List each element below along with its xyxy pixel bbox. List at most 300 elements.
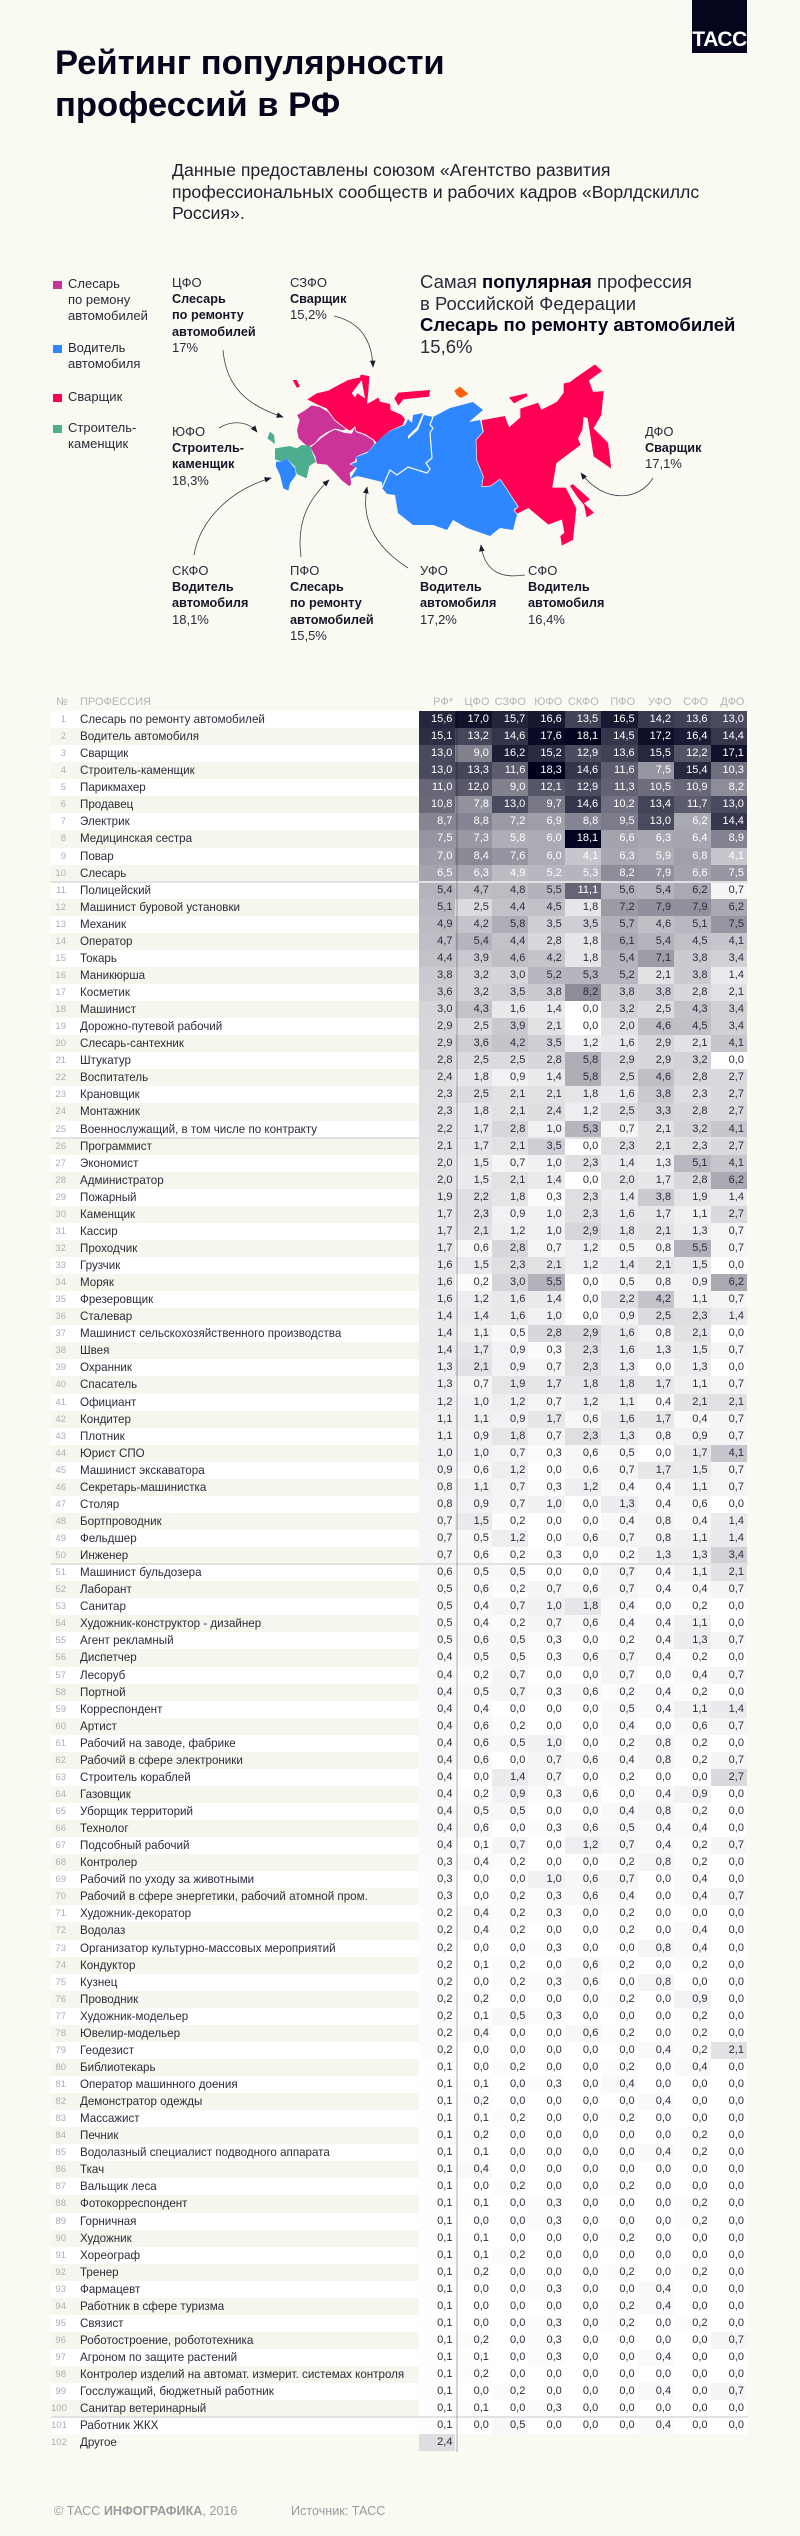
row 74: 0,2 (510, 1959, 525, 1971)
row 74: 74 (55, 1960, 66, 1971)
row 10: 5,3 (583, 867, 598, 879)
row 25: 5,3 (583, 1122, 598, 1134)
row 22: 4,6 (656, 1071, 671, 1083)
row 76: 0,0 (656, 1993, 671, 2005)
row 70: 0,2 (510, 1890, 525, 1902)
label: ЮФО: каменщик (172, 457, 234, 471)
row 1: 15,6 (431, 713, 452, 725)
row 38: 2,3 (583, 1344, 598, 1356)
row 64: 0,3 (546, 1788, 562, 1800)
row 65: 0,8 (656, 1805, 671, 1817)
row 37: 2,1 (692, 1327, 708, 1339)
row 77: 0,3 (546, 2010, 562, 2022)
row 46: 1,1 (692, 1481, 708, 1493)
row 6: Продавец (80, 798, 133, 811)
row 83: 0,0 (583, 2112, 598, 2124)
row 35: 1,1 (692, 1293, 708, 1305)
row 77: 0,2 (692, 2010, 708, 2022)
row 79: 0,2 (437, 2044, 452, 2056)
row 14: 6,1 (619, 935, 635, 947)
row 55: 0,0 (583, 1634, 598, 1646)
row 100: 0,0 (510, 2402, 525, 2414)
row 93: 0,0 (510, 2283, 525, 2295)
arrow: ЮФО (219, 423, 257, 432)
row 1: 16,6 (540, 713, 562, 725)
label: СКФО: Водитель (172, 580, 234, 594)
row 97: 0,1 (437, 2351, 452, 2363)
row 1: 13,6 (686, 713, 708, 725)
row 70: 0,3 (546, 1890, 562, 1902)
row 53: 0,5 (437, 1600, 452, 1612)
row 84: 0,0 (546, 2129, 562, 2141)
row 33: 1,6 (437, 1259, 452, 1271)
row 100 (51, 2400, 748, 2417)
row 62: 0,6 (583, 1754, 598, 1766)
row 14: 1,8 (583, 935, 598, 947)
row 31 (51, 1223, 748, 1240)
header: СЗФО: СЗФО (495, 696, 526, 708)
row 68: 0,8 (656, 1856, 671, 1868)
row 96: 0,1 (437, 2334, 452, 2346)
row 12: 7,9 (692, 901, 708, 913)
row 9 (51, 848, 748, 865)
row 24: 2,5 (619, 1105, 635, 1117)
row 51: 2,1 (729, 1566, 744, 1578)
row 17 (51, 984, 748, 1001)
row 86: 86 (55, 2164, 66, 2175)
row 27: 1,3 (656, 1157, 671, 1169)
row 22 (51, 1069, 748, 1086)
row 2: 14,4 (723, 730, 744, 742)
row 78: 0,6 (583, 2027, 598, 2039)
row 50 (51, 1547, 748, 1564)
row 62: 0,4 (437, 1754, 452, 1766)
row 95: 0,0 (583, 2317, 598, 2329)
row 18: 1,4 (546, 1003, 562, 1015)
row 98: 0,2 (474, 2368, 489, 2380)
row 55: 0,6 (474, 1634, 489, 1646)
row 55: 0,7 (729, 1634, 744, 1646)
row 31: 1,8 (619, 1225, 635, 1237)
row 42 (51, 1411, 748, 1428)
row 20: 2,1 (692, 1037, 708, 1049)
row 19: 3,9 (510, 1020, 525, 1032)
row 45: Машинист экскаватора (80, 1464, 205, 1477)
row 36 (51, 1308, 748, 1325)
row 62: 0,0 (510, 1754, 525, 1766)
row 20: 20 (55, 1038, 66, 1049)
row 61: 0,2 (619, 1737, 635, 1749)
map: ural and siberian districts (350, 402, 518, 536)
row 89: 0,3 (546, 2214, 562, 2226)
row 34: 34 (55, 1277, 66, 1288)
row 97: 0,0 (510, 2351, 525, 2363)
row 88: 0,2 (692, 2197, 708, 2209)
row 13: 7,5 (729, 918, 744, 930)
row 80 (51, 2059, 748, 2076)
row 60: 0,6 (692, 1720, 708, 1732)
row 45: 0,7 (729, 1464, 744, 1476)
row 25: 2,2 (437, 1122, 452, 1134)
row 85: 0,0 (729, 2146, 744, 2158)
row 7: 6,2 (692, 815, 708, 827)
row 2: 2 (61, 731, 66, 742)
row 46: 0,7 (729, 1481, 744, 1493)
row 33: 2,3 (510, 1259, 525, 1271)
row 77: 0,0 (583, 2010, 598, 2022)
row 72: 0,2 (619, 1924, 635, 1936)
row 12: 1,8 (583, 901, 598, 913)
row 94: 0,0 (729, 2300, 744, 2312)
row 36: 1,4 (437, 1310, 452, 1322)
row 64: 0,9 (510, 1788, 525, 1800)
row 67: 0,1 (474, 1839, 489, 1851)
row 41: 1,1 (619, 1396, 635, 1408)
row 77: 0,0 (619, 2010, 635, 2022)
row 1: Слесарь по ремонту автомобилей (80, 713, 265, 726)
row 95: 0,2 (619, 2317, 635, 2329)
row 93: 0,0 (729, 2283, 744, 2295)
row 55 (51, 1632, 748, 1649)
row 57: 0,0 (546, 1668, 562, 1680)
row 3: 9,0 (474, 747, 489, 759)
row 36: 1,4 (474, 1310, 489, 1322)
row 11: 4,8 (510, 884, 525, 896)
row 75: 0,3 (546, 1976, 562, 1988)
main callout: 15,6% (420, 336, 472, 357)
label: ДФО (645, 424, 702, 471)
row 99: 0,7 (729, 2385, 744, 2397)
row 21: 0,0 (729, 1054, 744, 1066)
row 33: 2,1 (656, 1259, 671, 1271)
row 1: 15,7 (504, 713, 525, 725)
row 37: 1,1 (474, 1327, 489, 1339)
row 15: 3,4 (729, 952, 744, 964)
row 79 (51, 2042, 748, 2059)
row 93: 0,4 (656, 2283, 671, 2295)
row 35: Фрезеровщик (80, 1293, 153, 1306)
row 73: 0,8 (656, 1942, 671, 1954)
row 87: 87 (55, 2181, 66, 2192)
row 8: 6,0 (546, 832, 562, 844)
row 29: 1,4 (619, 1191, 635, 1203)
row 5: 12,9 (577, 781, 598, 793)
row 9: 5,9 (656, 850, 671, 862)
row 57: 0,7 (729, 1668, 744, 1680)
row 22: 2,8 (692, 1071, 708, 1083)
row 100: 0,0 (583, 2402, 598, 2414)
row 28 (51, 1172, 748, 1189)
row 9: 4,1 (583, 850, 598, 862)
row 26: 2,1 (510, 1140, 525, 1152)
row 76: 0,2 (474, 1993, 489, 2005)
row 82: 0,0 (692, 2095, 708, 2107)
row 17: 2,8 (692, 986, 708, 998)
row 90 (51, 2230, 748, 2247)
row 43: 2,3 (583, 1430, 598, 1442)
row 45: 0,7 (619, 1464, 635, 1476)
logo: TASS (692, 0, 747, 53)
row 32: 0,5 (619, 1242, 635, 1254)
row 79: 0,4 (656, 2044, 671, 2056)
label: УФО: Водитель (420, 580, 482, 594)
row 82: 0,0 (510, 2095, 525, 2107)
row 85 (51, 2144, 748, 2161)
row 11: 11,1 (578, 884, 598, 896)
row 81: 0,1 (437, 2078, 452, 2090)
row 101: 0,5 (510, 2419, 525, 2431)
row 37: 2,9 (583, 1327, 598, 1339)
row 2: 18,1 (577, 730, 598, 742)
row 98: 0,0 (510, 2368, 525, 2380)
row 32: Проходчик (80, 1242, 137, 1255)
row 53: 0,4 (619, 1600, 635, 1612)
row 44 (51, 1445, 748, 1462)
row 2 (51, 728, 748, 745)
row 41: 1,2 (583, 1396, 598, 1408)
row 80: 0,2 (619, 2061, 635, 2073)
row 63: 0,4 (437, 1771, 452, 1783)
row 31: 1,2 (510, 1225, 525, 1237)
row 40 (51, 1376, 748, 1394)
row 73: 73 (55, 1942, 66, 1954)
row 92: 0,2 (619, 2266, 635, 2278)
row 15: 4,4 (437, 952, 452, 964)
row 56: 0,4 (437, 1651, 452, 1663)
row 63: 0,2 (619, 1771, 635, 1783)
row 80: 0,1 (437, 2061, 452, 2073)
row 55: 0,4 (656, 1634, 671, 1646)
row 84: Печник (80, 2129, 118, 2142)
row 86: 0,0 (656, 2163, 671, 2175)
row 76: 0,2 (437, 1993, 452, 2005)
row 33: 1,4 (619, 1259, 635, 1271)
row 90: 0,0 (510, 2232, 525, 2244)
row 55: 0,3 (546, 1634, 562, 1646)
row 24: 1,8 (474, 1105, 489, 1117)
row 56: 0,0 (729, 1651, 744, 1663)
row 31: 2,1 (474, 1225, 489, 1237)
row 53: 0,4 (474, 1600, 489, 1612)
row 46: 1,1 (474, 1481, 489, 1493)
row 77: 0,2 (437, 2010, 452, 2022)
row 20: Слесарь-сантехник (80, 1037, 184, 1050)
row 32: 2,8 (510, 1242, 525, 1254)
row 55: 0,5 (437, 1634, 452, 1646)
row 81: 0,0 (583, 2078, 598, 2090)
row 27: 5,1 (692, 1157, 708, 1169)
row 17: 3,6 (437, 986, 452, 998)
row 4: 7,5 (656, 764, 671, 776)
row 30: 30 (55, 1209, 66, 1220)
row 99: 0,0 (619, 2385, 635, 2397)
row 70: 0,3 (437, 1890, 452, 1902)
label: ПФО: автомобилей (290, 613, 374, 627)
row 86: 0,0 (729, 2163, 744, 2175)
row 97: 0,0 (729, 2351, 744, 2363)
row 47: 0,0 (729, 1498, 744, 1510)
row 99: Госслужащий, бюджетный работник (80, 2385, 274, 2398)
row 13: 5,1 (692, 918, 708, 930)
row 40: 0,7 (729, 1378, 744, 1390)
row 42: 1,1 (474, 1413, 489, 1425)
row 8: 6,6 (619, 832, 635, 844)
row 63: 63 (55, 1772, 66, 1783)
row 19: 4,6 (656, 1020, 671, 1032)
row 90: 90 (55, 2233, 66, 2244)
row 32: 1,2 (583, 1242, 598, 1254)
row 58: 0,6 (583, 1686, 598, 1698)
row 54: 0,4 (619, 1617, 635, 1629)
row 41: 41 (55, 1396, 66, 1408)
row 85: 0,0 (510, 2146, 525, 2158)
row 11 (51, 882, 748, 899)
header: ПФО: ПФО (610, 696, 635, 708)
row 96: 0,0 (619, 2334, 635, 2346)
map: southern and caucasus districts (267, 432, 316, 491)
row 49: Фельдшер (80, 1532, 137, 1545)
row 9: 6,8 (692, 850, 708, 862)
row 32: 32 (55, 1243, 66, 1254)
row 45: 0,0 (546, 1464, 562, 1476)
row 2: 13,2 (467, 730, 489, 742)
row 43: 0,9 (692, 1430, 708, 1442)
row 27: 1,4 (619, 1157, 635, 1169)
row 93: 0,0 (692, 2283, 708, 2295)
arrow: СФО (481, 545, 525, 576)
row 41: 2,1 (692, 1396, 708, 1408)
row 24: 1,2 (583, 1105, 598, 1117)
row 11: 4,7 (474, 884, 489, 896)
row 92: 0,0 (656, 2266, 671, 2278)
row 1 (51, 711, 748, 728)
row 7: 7,2 (510, 815, 525, 827)
row 25: 2,8 (510, 1122, 525, 1134)
row 32: 0,8 (656, 1242, 671, 1254)
row 79: Геодезист (80, 2044, 134, 2057)
row 52: 0,5 (437, 1583, 452, 1595)
row 31: Кассир (80, 1225, 118, 1238)
row 44: 1,7 (692, 1447, 708, 1459)
row 71: 0,3 (546, 1907, 562, 1919)
row 31: 2,1 (656, 1225, 671, 1237)
row 1: 17,0 (467, 713, 489, 725)
row 98: 0,0 (656, 2368, 671, 2380)
row 54: 0,4 (656, 1617, 671, 1629)
row 64: 0,0 (619, 1788, 635, 1800)
label: СЗФО: Сварщик (290, 292, 346, 306)
header: ДФО: ДФО (720, 696, 744, 708)
row 67: 0,7 (510, 1839, 525, 1851)
row 38 (51, 1342, 748, 1359)
row 101: 0,4 (656, 2419, 671, 2431)
row 10: 4,9 (510, 867, 525, 879)
row 66: 0,5 (619, 1822, 635, 1834)
row 82: 0,0 (729, 2095, 744, 2107)
main callout (420, 271, 735, 357)
row 82: 0,1 (437, 2095, 452, 2107)
row 86: 0,0 (619, 2163, 635, 2175)
row 23: 1,6 (619, 1088, 635, 1100)
row 36: Сталевар (80, 1310, 132, 1323)
arrow: СЗФО (334, 316, 373, 367)
row 15: 4,2 (546, 952, 562, 964)
row 51: 0,0 (546, 1566, 562, 1578)
row 62: 62 (55, 1755, 66, 1766)
row 96: Роботостроение, робототехника (80, 2334, 253, 2347)
row 52: 0,4 (692, 1583, 708, 1595)
footer: copyright: © ТАСС ИНФОГРАФИКА, 2016 (54, 2504, 237, 2518)
row 4: 4 (61, 765, 66, 776)
row 56: 0,3 (546, 1651, 562, 1663)
row 22: 1,4 (546, 1071, 562, 1083)
row 87: 0,0 (474, 2180, 489, 2192)
row 83: 83 (55, 2113, 66, 2124)
label: ЮФО: Строитель- (172, 441, 244, 455)
row 74: 0,6 (583, 1959, 598, 1971)
row 47: 0,9 (474, 1498, 489, 1510)
row 9: 6,3 (619, 850, 635, 862)
row 64: 64 (55, 1789, 66, 1800)
label: УФО (420, 563, 496, 627)
row 56 (51, 1649, 748, 1666)
row 8: 5,8 (510, 832, 525, 844)
row 99: 0,1 (437, 2385, 452, 2397)
intro text: Данные предоставлены союзом «Агентство развития (172, 160, 610, 180)
row 38: 1,7 (474, 1344, 489, 1356)
row 67: Подсобный рабочий (80, 1839, 189, 1852)
row 75: 0,0 (619, 1976, 635, 1988)
row 78: 78 (55, 2028, 66, 2039)
row 43: 1,1 (437, 1430, 452, 1442)
row 20: 1,6 (619, 1037, 635, 1049)
row 22: 0,9 (510, 1071, 525, 1083)
row 42: 0,9 (510, 1413, 525, 1425)
row 17: 2,1 (729, 986, 744, 998)
row 54: 0,4 (474, 1617, 489, 1629)
row 8: 8 (61, 833, 66, 844)
row 58: 0,4 (437, 1686, 452, 1698)
row 59: 0,4 (437, 1703, 452, 1715)
main callout: Самая популярная профессия (420, 271, 692, 292)
row 29: 2,2 (474, 1191, 489, 1203)
row 61: 61 (55, 1738, 66, 1749)
row 3: 13,0 (431, 747, 452, 759)
row 80: 0,0 (546, 2061, 562, 2073)
row 88: 88 (55, 2198, 66, 2209)
row 42: 42 (55, 1414, 66, 1425)
row 14: 4,1 (729, 935, 744, 947)
row 34: 0,0 (583, 1276, 598, 1288)
row 80: Библиотекарь (80, 2061, 156, 2074)
row 78: 0,0 (510, 2027, 525, 2039)
row 36: 2,5 (656, 1310, 671, 1322)
row 48: 0,0 (546, 1515, 562, 1527)
row 29: Пожарный (80, 1191, 137, 1204)
row 15: 1,8 (583, 952, 598, 964)
row 22: 5,8 (583, 1071, 598, 1083)
row 59: 0,0 (583, 1703, 598, 1715)
row 94: 0,0 (510, 2300, 525, 2312)
row 3 (51, 745, 748, 762)
row 92: 0,1 (437, 2266, 452, 2278)
row 29: 3,8 (656, 1191, 671, 1203)
row 7: 8,8 (474, 815, 489, 827)
row 100: 0,1 (437, 2402, 452, 2414)
row 65: 0,2 (692, 1805, 708, 1817)
row 5: 12,1 (540, 781, 562, 793)
legend item: slesar: по ремону (68, 292, 130, 307)
